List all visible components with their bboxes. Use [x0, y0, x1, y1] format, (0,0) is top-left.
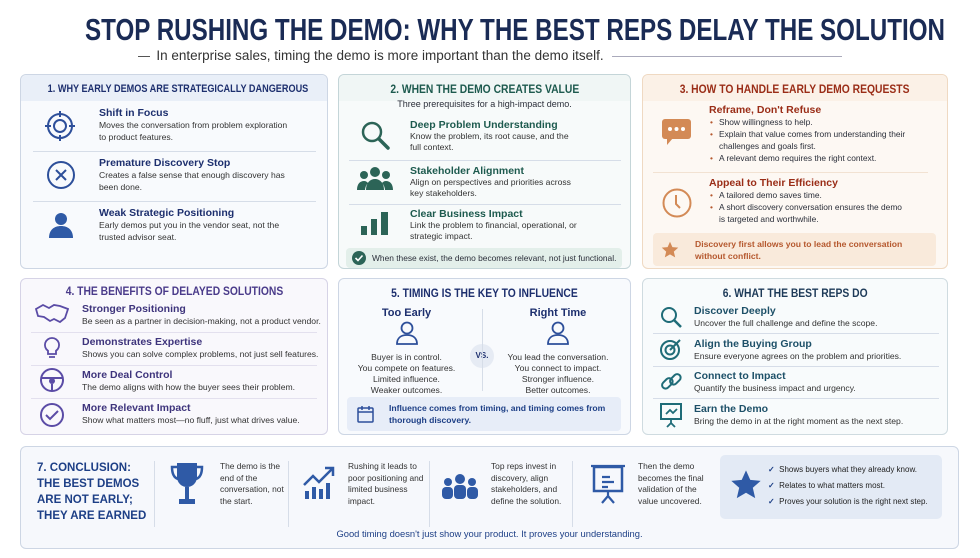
icon: target [660, 339, 681, 360]
icon: trophy [169, 461, 205, 509]
conclusion heading: THE BEST DEMOS [37, 478, 139, 490]
item: shift in focus: Shift in Focus [99, 107, 168, 119]
callout [346, 248, 622, 268]
item: connect: Connect to Impact [694, 370, 786, 382]
subtitle: In enterprise sales, timing the demo is more important than the demo itself. [156, 48, 604, 63]
item: weak positioning: Weak Strategic Positioning [99, 207, 234, 219]
checklist box: ✓ Relates to what matters most. [768, 481, 885, 490]
icon: clock [662, 188, 692, 218]
conclusion heading: ARE NOT EARLY; [37, 494, 133, 506]
panel 5 [338, 278, 631, 435]
heading 6: 6. WHAT THE BEST REPS DO [723, 286, 867, 300]
item: relevant impact [82, 402, 300, 425]
heading 2 [339, 75, 630, 101]
icon: magnifier [661, 307, 682, 328]
item: expertise: Demonstrates Expertise [82, 336, 202, 348]
callout: When these exist, the demo becomes relevant, not just functional. [372, 253, 616, 263]
item: earn: Earn the Demo [694, 403, 768, 415]
item: earn [694, 403, 903, 426]
item: stronger positioning: Be seen as a partner in decision-making, not a product vendor. [82, 316, 321, 326]
icon: x circle [47, 161, 75, 189]
item: earn: Bring the demo in at the right moment as the next step. [694, 416, 903, 426]
heading 3 [643, 75, 947, 101]
item: stronger positioning: Stronger Positioning [82, 303, 186, 315]
item: align [694, 338, 901, 361]
text: demo end: The demo is the end of the conversation, not the start. [220, 461, 284, 506]
item: deep problem: Know the problem, its root cause, and the full context. [410, 131, 569, 152]
item: business impact: Link the problem to financial, operational, or strategic impact. [410, 220, 577, 241]
item: stakeholder: Align on perspectives and priorities across key stakeholders. [410, 177, 571, 198]
icon: board [591, 463, 625, 505]
item: appeal: A short discovery conversation ensures the demo is targeted and worthwhile. [719, 202, 902, 224]
callout: Discovery first allows you to lead the conversation without conflict. [695, 239, 902, 261]
item: connect: Quantify the business impact and urgency. [694, 383, 856, 393]
heading 3: 3. HOW TO HANDLE EARLY DEMO REQUESTS [680, 82, 910, 96]
item: deal control: More Deal Control [82, 369, 172, 381]
item: premature stop: Creates a false sense that enough discovery has been done. [99, 170, 285, 192]
panel 1 [20, 74, 328, 269]
column: too early: Weaker outcomes. [371, 385, 442, 395]
item: premature stop [99, 157, 285, 192]
item: appeal: A tailored demo saves time. [719, 190, 822, 200]
icon: group [357, 167, 393, 190]
item: premature stop: Premature Discovery Stop [99, 157, 230, 169]
item: shift in focus: Moves the conversation from problem exploration to product features. [99, 120, 287, 142]
item: expertise [82, 336, 318, 359]
item: appeal [709, 177, 902, 224]
heading 2: 2. WHEN THE DEMO CREATES VALUE [390, 82, 579, 96]
column: too early: Too Early [382, 307, 431, 319]
checklist box: ✓ Proves your solution is the right next step. [768, 497, 928, 506]
callout: Influence comes from timing, and timing comes from thorough discovery. [389, 403, 605, 425]
icon: link [661, 373, 682, 390]
panel 4 [20, 278, 328, 435]
column: too early: Buyer is in control. [371, 352, 442, 362]
item: reframe: Show willingness to help. [719, 117, 813, 127]
text: rushing: Rushing it leads to poor positioning and limited business impact. [348, 461, 423, 506]
footer tagline: Good timing doesn't just show your product. It proves your understanding. [336, 528, 643, 539]
column: too early [358, 307, 455, 395]
item: deep problem [410, 119, 569, 152]
text: final validation: Then the demo becomes the final validation of the value uncovered. [638, 461, 704, 506]
conclusion heading: THEY ARE EARNED [37, 510, 146, 522]
item: stakeholder: Stakeholder Alignment [410, 165, 524, 177]
icon: team [441, 473, 479, 499]
subheading: Three prerequisites for a high-impact demo. [397, 99, 572, 109]
column: right time: You lead the conversation. [508, 352, 608, 362]
icon: handshake [35, 304, 69, 324]
column: right time: Stronger influence. [522, 374, 594, 384]
item: reframe: Reframe, Don't Refuse [709, 104, 821, 116]
item: align: Ensure everyone agrees on the problem and priorities. [694, 351, 901, 361]
panel 3 [642, 74, 948, 269]
item: weak positioning: Early demos put you in the vendor seat, not the trusted advisor seat. [99, 220, 279, 242]
heading 1: 1. WHY EARLY DEMOS ARE STRATEGICALLY DANGEROUS [48, 83, 308, 95]
text: top reps: Top reps invest in discovery, align stakeholders, and define the solution. [491, 461, 561, 506]
item: business impact [410, 208, 577, 241]
item: deal control: The demo aligns with how the buyer sees their problem. [82, 382, 295, 392]
checklist box [720, 455, 942, 519]
heading 5: 5. TIMING IS THE KEY TO INFLUENCE [391, 286, 578, 300]
item: connect [694, 370, 856, 393]
icon: magnifier [362, 122, 390, 150]
checklist box: ✓ Shows buyers what they already know. [768, 465, 917, 474]
column: right time: You connect to impact. [515, 363, 601, 373]
callout [653, 233, 936, 266]
icon: bulb [44, 337, 60, 358]
item: weak positioning [99, 207, 279, 242]
column: too early: Limited influence. [373, 374, 440, 384]
heading 1 [21, 75, 327, 101]
item: stakeholder [410, 165, 571, 198]
icon: wheel [40, 368, 64, 392]
item: reframe [709, 104, 906, 163]
item: business impact: Clear Business Impact [410, 208, 523, 220]
item: reframe: A relevant demo requires the right context. [719, 153, 876, 163]
icon: person [49, 213, 73, 238]
item: expertise: Shows you can solve complex problems, not just sell features. [82, 349, 318, 359]
icon: check circle [40, 403, 64, 427]
icon: presentation [660, 403, 682, 428]
panel 6 [642, 278, 948, 435]
item: relevant impact: More Relevant Impact [82, 402, 191, 414]
item: reframe: Explain that value comes from understanding their challenges and goals first. [719, 129, 905, 151]
vs badge: VS. [476, 351, 488, 360]
item: discover [694, 305, 877, 328]
panel 7: conclusion [20, 446, 959, 549]
item: deal control [82, 369, 295, 392]
column: right time [508, 307, 608, 395]
icon: bar chart [361, 212, 388, 235]
item: discover: Uncover the full challenge and define the scope. [694, 318, 877, 328]
item: shift in focus [99, 107, 287, 142]
column: too early: You compete on features. [358, 363, 455, 373]
item: appeal: Appeal to Their Efficiency [709, 177, 838, 189]
item: relevant impact: Show what matters most—no fluff, just what drives value. [82, 415, 300, 425]
item: stronger positioning [82, 303, 321, 326]
heading 4: 4. THE BENEFITS OF DELAYED SOLUTIONS [65, 284, 283, 298]
conclusion heading: 7. CONCLUSION: [37, 462, 131, 474]
panel 2 [338, 74, 631, 269]
item: discover: Discover Deeply [694, 305, 776, 317]
icon: target [45, 111, 75, 141]
vs badge [470, 344, 494, 368]
item: deep problem: Deep Problem Understanding [410, 119, 558, 131]
column: right time: Right Time [530, 307, 586, 319]
icon: growth chart [303, 465, 337, 501]
callout [347, 397, 621, 431]
column: right time: Better outcomes. [526, 385, 590, 395]
conclusion heading [37, 462, 146, 522]
item: align: Align the Buying Group [694, 338, 812, 350]
icon: chat [662, 119, 691, 145]
